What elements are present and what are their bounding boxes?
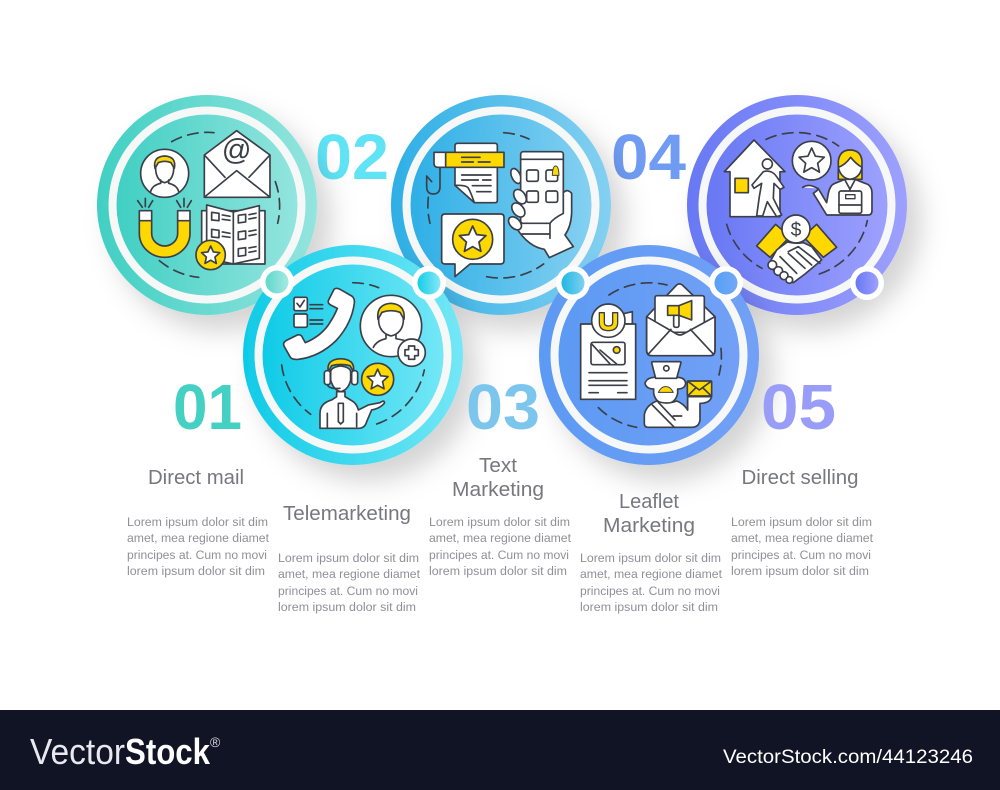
connector node 2 (412, 266, 446, 300)
text column 5: direct selling: principes at. Cum no movi (731, 548, 871, 562)
connector node 4 (709, 266, 743, 300)
footer logo: ® (210, 734, 221, 750)
footer url: VectorStock.com/44123246 (723, 746, 973, 768)
text column 4: leaflet marketing (580, 491, 723, 614)
text column 5: direct selling: Lorem ipsum dolor sit dim (731, 515, 872, 529)
number 03: 03 (466, 371, 540, 443)
text column 1: direct mail: amet, mea regione diamet (127, 531, 270, 545)
text column 2: telemarketing: principes at. Cum no movi (278, 584, 418, 598)
number 04: 04 (611, 121, 686, 193)
text column 2: telemarketing: Telemarketing (283, 503, 411, 525)
panel: circle 1 direct mail (97, 95, 317, 315)
text column 1: direct mail (127, 467, 270, 578)
text column 3: text marketing: Text (479, 455, 517, 477)
number 01: 01 (173, 371, 242, 443)
text column 1: direct mail: Lorem ipsum dolor sit dim (127, 515, 268, 529)
icons: text marketing (427, 133, 573, 278)
text column 2: telemarketing (278, 503, 421, 614)
footer bar (0, 710, 1000, 790)
text column 3: text marketing: Marketing (452, 479, 544, 501)
connector node 3 (556, 266, 590, 300)
number 05: 05 (761, 371, 836, 443)
text column 3: text marketing: principes at. Cum no movi (429, 548, 569, 562)
text column 3: text marketing: lorem ipsum dolor sit dim (429, 564, 567, 578)
icons: direct mail (138, 131, 280, 277)
icons: telemarketing (282, 283, 425, 428)
text column 3: text marketing (429, 455, 572, 578)
icons: direct selling (724, 133, 872, 283)
text column 3: text marketing: amet, mea regione diamet (429, 531, 572, 545)
number 02: 02 (315, 121, 389, 193)
text column 5: direct selling (731, 467, 874, 578)
text column 5: direct selling: lorem ipsum dolor sit dim (731, 564, 869, 578)
text column 4: leaflet marketing: amet, mea regione diamet (580, 567, 723, 581)
panel: circle 2 telemarketing (243, 245, 463, 465)
footer logo (30, 731, 221, 772)
footer logo: Vector (30, 731, 125, 772)
panel: circle 4 leaflet marketing (539, 245, 759, 465)
text column 4: leaflet marketing: Marketing (603, 515, 695, 537)
text column 5: direct selling: amet, mea regione diamet (731, 531, 874, 545)
footer logo: Stock (125, 731, 211, 772)
text column 4: leaflet marketing: principes at. Cum no movi (580, 584, 720, 598)
text column 4: leaflet marketing: lorem ipsum dolor sit dim (580, 600, 718, 614)
text column 1: direct mail: Direct mail (148, 467, 244, 489)
icons: direct selling: $ (791, 220, 802, 241)
text column 1: direct mail: principes at. Cum no movi (127, 548, 267, 562)
panel: circle 3 text marketing (391, 95, 611, 315)
text column 3: text marketing: Lorem ipsum dolor sit dim (429, 515, 570, 529)
text column 2: telemarketing: amet, mea regione diamet (278, 567, 421, 581)
connector node 5 (850, 266, 884, 300)
panel: circle 5 direct selling (687, 95, 907, 315)
connector node 1 (260, 265, 294, 299)
text column 1: direct mail: lorem ipsum dolor sit dim (127, 564, 265, 578)
icons: direct mail: @ (222, 133, 252, 166)
text column 2: telemarketing: lorem ipsum dolor sit dim (278, 600, 416, 614)
text column 4: leaflet marketing: Leaflet (619, 491, 679, 513)
text column 4: leaflet marketing: Lorem ipsum dolor sit dim (580, 551, 721, 565)
text column 2: telemarketing: Lorem ipsum dolor sit dim (278, 551, 419, 565)
icons: leaflet marketing (581, 283, 721, 427)
text column 5: direct selling: Direct selling (742, 467, 858, 489)
